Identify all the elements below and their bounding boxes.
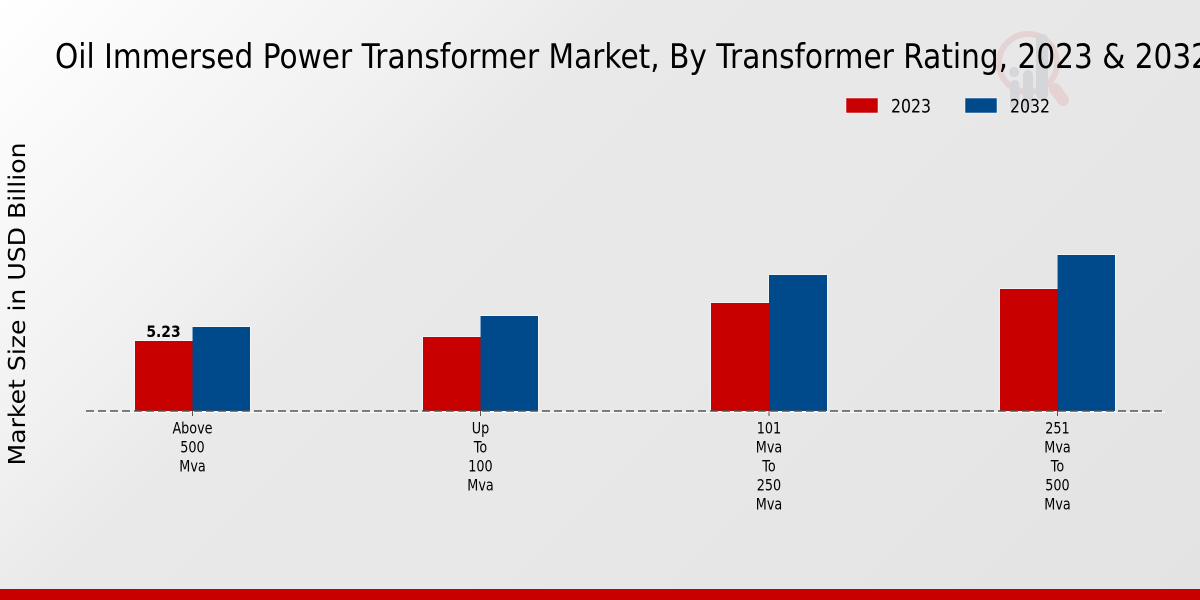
- group: Up To 100 Mva: [423, 316, 538, 411]
- bar chart: [86, 255, 1165, 416]
- category label: 101 Mva To 250 Mva: To: [761, 458, 776, 476]
- category label: 101 Mva To 250 Mva: 101: [757, 420, 781, 438]
- category label: Above 500 Mva: 500: [180, 439, 205, 457]
- legend item: 2032: 2032: [1010, 96, 1050, 118]
- category label: 101 Mva To 250 Mva: [756, 420, 782, 514]
- group: 101 Mva To 250 Mva: [711, 275, 827, 411]
- legend: [846, 96, 1050, 118]
- group: 251 Mva To 500 Mva: [1000, 255, 1115, 411]
- legend item: 2032: [965, 96, 1050, 118]
- legend item: 2023: 2023: [891, 96, 931, 118]
- icon: watermark magnifier with bars: [999, 34, 1063, 110]
- category label: Up To 100 Mva: 100: [468, 458, 493, 476]
- category label: Above 500 Mva: [172, 420, 213, 476]
- footer bar: [0, 589, 1200, 600]
- category label: Up To 100 Mva: Up: [472, 420, 489, 438]
- category label: 251 Mva To 500 Mva: Mva: [1044, 496, 1071, 514]
- category label: 251 Mva To 500 Mva: Mva: [1044, 439, 1071, 457]
- category label: Up To 100 Mva: Mva: [467, 477, 494, 495]
- category label: 251 Mva To 500 Mva: To: [1050, 458, 1064, 476]
- category label: Up To 100 Mva: [467, 420, 494, 495]
- data label: 5.23: 5.23: [146, 322, 181, 341]
- y axis label: Market Size in USD Billion: [5, 142, 31, 466]
- category label: Above 500 Mva: Above: [172, 420, 213, 438]
- category label: Above 500 Mva: Mva: [179, 458, 206, 476]
- category label: 101 Mva To 250 Mva: Mva: [756, 496, 782, 514]
- group: Above 500 Mva: [135, 327, 250, 411]
- category label: 251 Mva To 500 Mva: [1044, 420, 1071, 514]
- category label: 101 Mva To 250 Mva: Mva: [756, 439, 782, 457]
- category label: 251 Mva To 500 Mva: 500: [1045, 477, 1070, 495]
- category label: 101 Mva To 250 Mva: 250: [757, 477, 781, 495]
- category label: Up To 100 Mva: To: [473, 439, 487, 457]
- legend item: 2023: [846, 96, 931, 118]
- category label: 251 Mva To 500 Mva: 251: [1045, 420, 1070, 438]
